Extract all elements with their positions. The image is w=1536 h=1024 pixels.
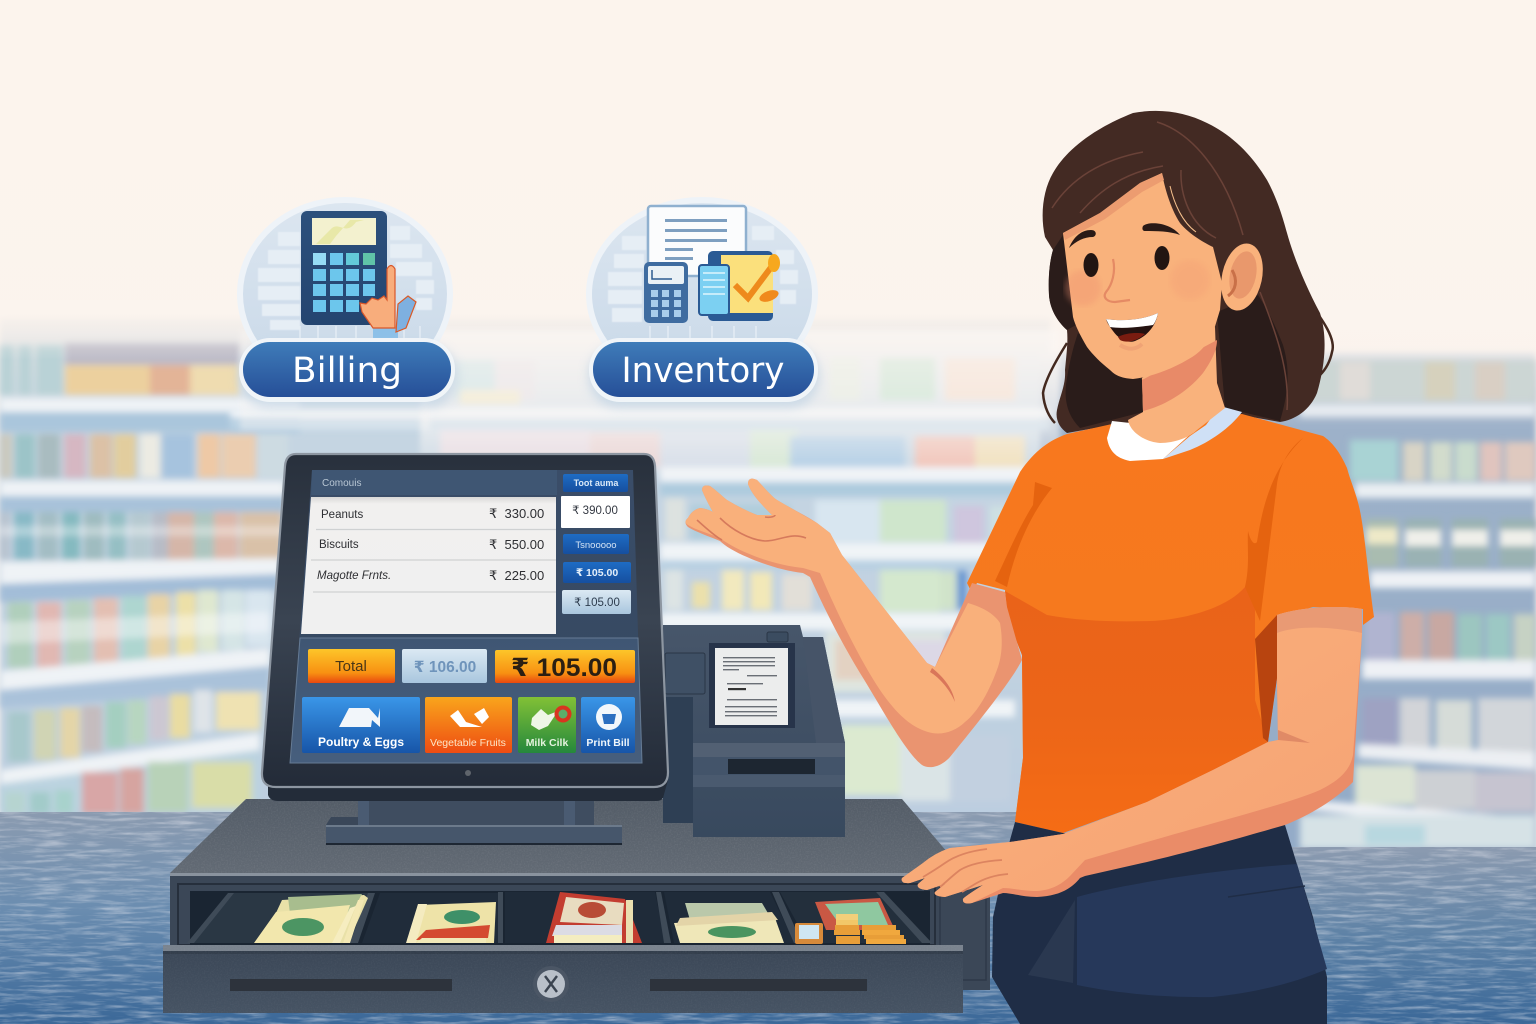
side buttons: ₹ 390.00	[572, 505, 618, 517]
hair highlights	[1052, 122, 1287, 410]
item list: ₹ 330.00	[489, 506, 544, 521]
total buttons: Total	[335, 658, 367, 675]
screen	[290, 470, 642, 763]
background: blurred centre shelves	[230, 358, 1050, 801]
bills: compartment 1	[254, 894, 368, 943]
nose	[1105, 259, 1130, 302]
icon: tapping hand	[360, 266, 416, 338]
receipt printer	[663, 625, 845, 837]
tile: Vegetable Fruits: Vegetable Fruits	[430, 737, 506, 749]
tile: Milk Cilk: Milk Cilk	[526, 737, 568, 749]
cash drawer	[160, 795, 990, 1013]
background: haze over the upper middle shelves	[0, 300, 1536, 475]
background: blurred left shelves	[0, 343, 300, 814]
drawer housing	[170, 873, 990, 990]
eyebrows	[1069, 223, 1180, 248]
skirt	[992, 822, 1327, 1024]
side buttons	[561, 474, 631, 614]
icon: inventory globe badge	[589, 200, 815, 388]
item list: Biscuits	[319, 539, 359, 551]
bills: compartment 2	[406, 902, 496, 943]
ear	[1215, 240, 1269, 314]
shop assistant	[686, 111, 1374, 1024]
total buttons	[308, 649, 635, 683]
tile: Milk Cilk	[518, 697, 576, 753]
left arm and open hand	[686, 479, 1022, 767]
inventory icon group	[589, 200, 815, 388]
money compartments	[187, 891, 932, 945]
icon: billing globe badge	[240, 200, 450, 388]
label: Inventory pill	[588, 338, 820, 408]
total buttons: ₹ 105.00	[511, 654, 617, 682]
hair back	[1043, 111, 1333, 433]
bills: compartment 4	[674, 903, 784, 943]
side buttons: Tsnooooo	[575, 540, 617, 551]
billing icon group	[240, 200, 450, 388]
side buttons: ₹ 105.00	[576, 567, 618, 579]
icon: inventory calculator	[644, 262, 688, 323]
power indicator	[465, 770, 471, 776]
item list: Magotte Frnts.	[317, 570, 391, 582]
drawer lock	[533, 966, 569, 1002]
counter top	[0, 812, 1536, 1024]
item list: Peanuts	[321, 509, 363, 521]
drawer front panel	[163, 945, 963, 1013]
tile: Print Bill: Print Bill	[586, 737, 630, 749]
torso shirt	[967, 414, 1374, 833]
item list: ₹ 550.00	[489, 537, 544, 552]
neck	[1128, 327, 1225, 443]
side buttons: Toot auma	[574, 478, 619, 488]
neck shadow	[1142, 340, 1217, 411]
item list: ₹ 225.00	[489, 568, 544, 583]
background: blurred right shelves	[1300, 360, 1536, 849]
icon: checklist tablet	[699, 251, 780, 321]
right arm and hand on drawer	[902, 607, 1362, 904]
bills and coins: compartment 5	[795, 898, 906, 944]
label: Billing pill: Billing	[292, 351, 402, 391]
POS touchscreen monitor	[262, 454, 668, 801]
bills: compartment 3	[546, 892, 642, 943]
tile: Poultry and Eggs: Poultry & Eggs	[318, 735, 404, 749]
item list	[301, 497, 556, 634]
header bar	[311, 470, 557, 495]
face	[1063, 173, 1222, 379]
monitor stand	[326, 795, 622, 845]
tile: Vegetable Fruits	[425, 697, 512, 753]
label: Billing pill	[238, 338, 458, 408]
drawer top surface	[170, 799, 946, 873]
side buttons: ₹ 105.00	[574, 597, 620, 609]
tile: Poultry and Eggs	[302, 697, 420, 753]
printed receipt	[709, 643, 795, 728]
icon: document	[648, 206, 746, 276]
total buttons: ₹ 106.00	[414, 659, 476, 676]
tile: Print Bill	[581, 697, 635, 753]
collar	[1107, 406, 1242, 461]
label: Inventory pill: Inventory	[622, 351, 784, 391]
lower button panel	[290, 638, 642, 763]
icon: calculator	[301, 211, 387, 325]
header bar: Comouis	[322, 478, 361, 489]
smile	[1106, 313, 1158, 349]
eyes	[1084, 246, 1170, 277]
